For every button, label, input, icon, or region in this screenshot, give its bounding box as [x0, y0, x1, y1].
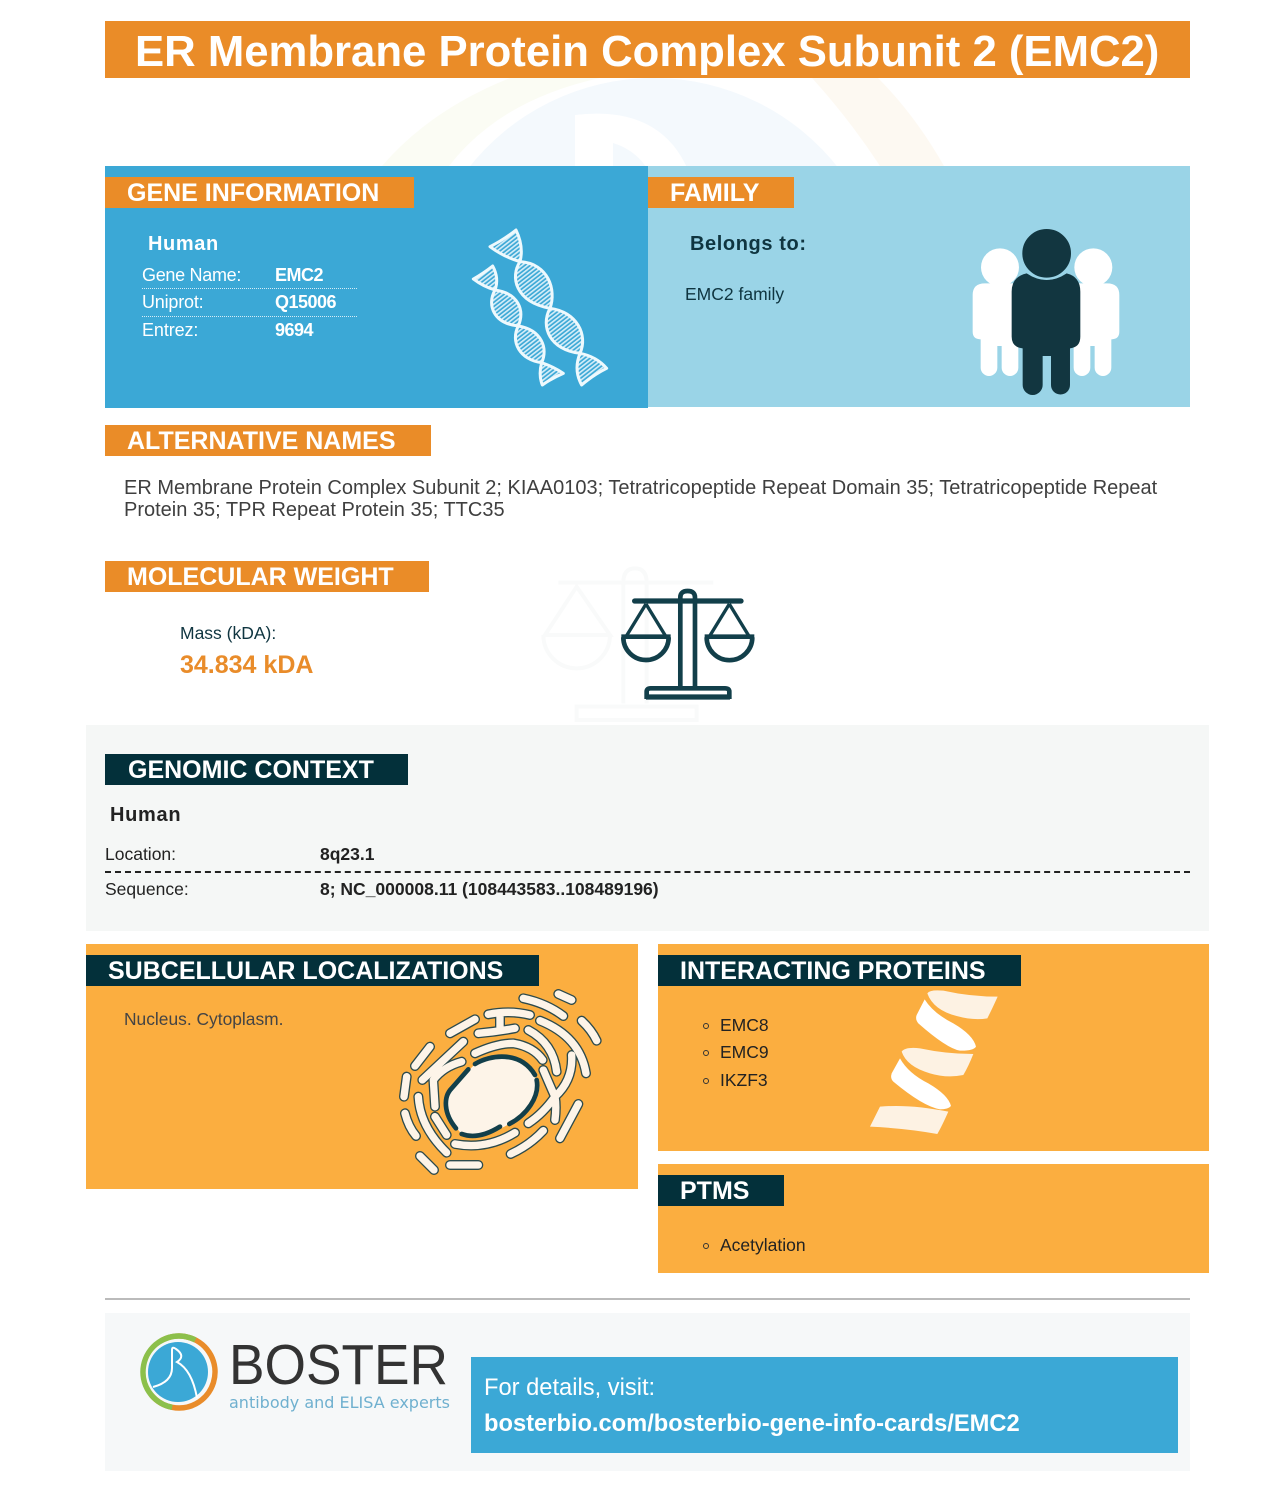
location row — [105, 843, 1190, 873]
belongs to label: Belongs to: — [690, 233, 807, 255]
heading: family: FAMILY — [670, 178, 759, 206]
heading: alternative names: ALTERNATIVE NAMES — [127, 426, 396, 454]
protein list — [703, 1015, 769, 1090]
title banner: ER Membrane Protein Complex Subunit 2 (EMC2) — [135, 27, 1159, 76]
panel: ptms — [658, 1164, 1209, 1273]
entrez row: 9694 — [275, 320, 313, 340]
uniprot row — [142, 293, 357, 317]
protein list: EMC9 — [720, 1042, 769, 1062]
panel: gene information — [105, 166, 648, 408]
heading: family — [648, 177, 794, 208]
panel: interacting proteins — [658, 944, 1209, 1151]
heading: subcellular localizations: SUBCELLULAR LOCALIZATIONS — [108, 956, 503, 984]
location row: 8q23.1 — [320, 844, 374, 864]
footer divider — [105, 1298, 1190, 1300]
call to action box: bosterbio.com/bosterbio-gene-info-cards/EMC2 — [484, 1411, 1020, 1437]
logo: boster: antibody and ELISA experts — [229, 1393, 450, 1412]
sequence row: Sequence: — [105, 879, 189, 899]
gene name row: EMC2 — [275, 265, 323, 285]
family value: EMC2 family — [685, 284, 784, 304]
gene name row — [142, 266, 357, 289]
gene name row: Gene Name: — [142, 265, 241, 285]
location row: Location: — [105, 844, 176, 864]
heading: genomic context: GENOMIC CONTEXT — [128, 756, 374, 784]
protein list: IKZF3 — [720, 1070, 768, 1090]
entrez row: Entrez: — [142, 320, 198, 340]
panel: genomic context — [86, 725, 1209, 931]
panel: subcellular localizations — [86, 944, 638, 1189]
call to action box — [471, 1357, 1178, 1453]
species label: Human — [148, 233, 219, 255]
mass value: 34.834 kDA — [180, 651, 313, 679]
ptm list: Acetylation — [720, 1235, 806, 1255]
icon: balance scale — [621, 588, 755, 700]
icon: group of people — [972, 229, 1120, 395]
entrez row — [142, 320, 314, 340]
heading: ptms: PTMS — [680, 1176, 749, 1204]
protein list: EMC8 — [720, 1015, 769, 1035]
call to action box: For details, visit: — [484, 1375, 655, 1401]
mass label: Mass (kDA): — [180, 623, 276, 643]
background watermark logo — [382, 78, 944, 166]
sequence row — [105, 879, 659, 899]
logo: boster: BOSTER — [229, 1333, 448, 1397]
icon: dna double helix — [472, 228, 608, 386]
heading: ptms — [658, 1175, 784, 1206]
sequence row: 8; NC_000008.11 (108443583..108489196) — [320, 879, 659, 899]
logo: boster — [140, 1333, 450, 1412]
localization text: Nucleus. Cytoplasm. — [124, 1009, 283, 1029]
uniprot row: Q15006 — [275, 292, 336, 312]
panel: family — [648, 166, 1190, 407]
alternative names text: Protein 35; TPR Repeat Protein 35; TTC35 — [124, 499, 505, 521]
uniprot row: Uniprot: — [142, 292, 203, 312]
species label: Human — [110, 804, 181, 826]
heading: interacting proteins: INTERACTING PROTEINS — [680, 956, 986, 984]
heading: molecular weight: MOLECULAR WEIGHT — [127, 562, 394, 590]
alternative names text: ER Membrane Protein Complex Subunit 2; KIAA0103; Tetratricopeptide Repeat Domain 35; Tetratricopeptide Repeat — [124, 477, 1157, 499]
alternative names text — [124, 477, 1158, 521]
heading: gene information: GENE INFORMATION — [127, 178, 379, 206]
panel: footer — [105, 1313, 1190, 1471]
